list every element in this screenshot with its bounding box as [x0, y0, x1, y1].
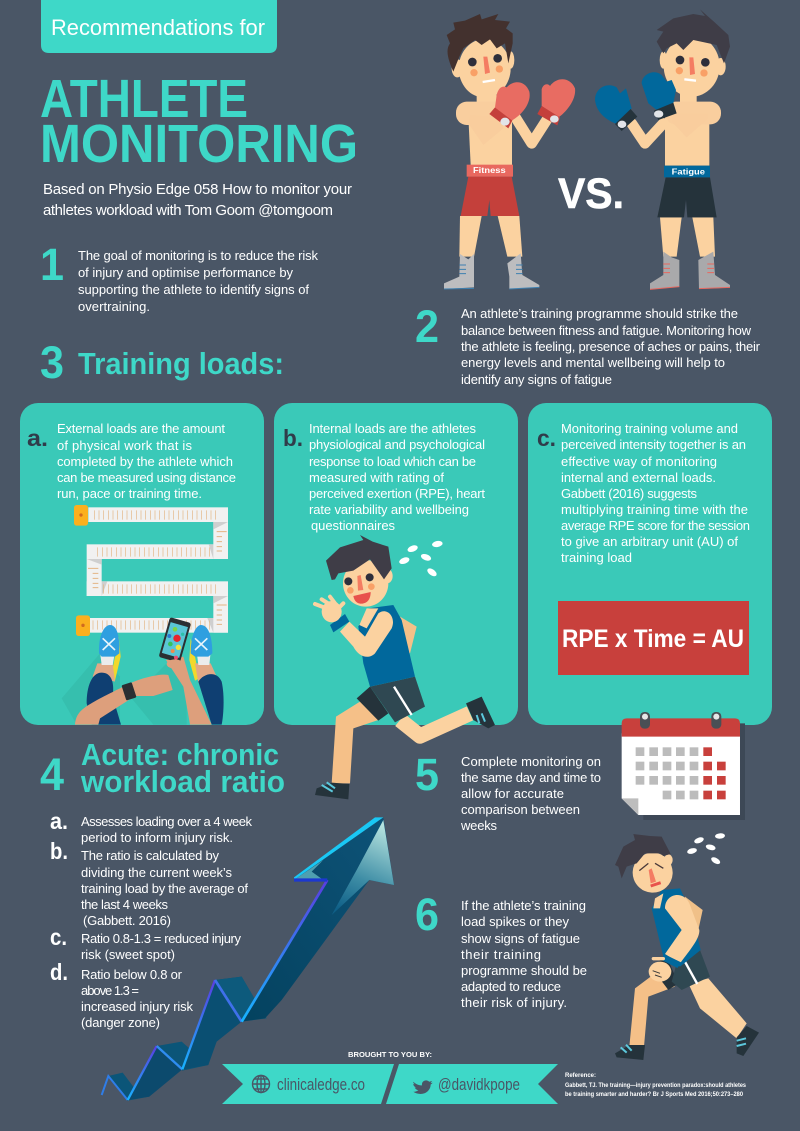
formula box — [558, 601, 749, 675]
reference: Reference: — [565, 1073, 596, 1079]
point 1: The goal of monitoring is to reduce the risk — [78, 248, 318, 263]
combined monitoring text: perceived intensity together is an — [561, 437, 746, 452]
point 4 list — [50, 808, 252, 1030]
combined monitoring text: internal and external loads. — [561, 470, 716, 485]
point 4 list: (danger zone) — [81, 1015, 160, 1030]
point 4 list: (Gabbett. 2016) — [83, 913, 171, 928]
point 1 — [40, 239, 318, 314]
point 4 list: dividing the current week’s — [81, 865, 232, 880]
illustration: fatigued runner — [615, 833, 759, 1060]
panel: combined monitoring — [528, 403, 772, 725]
external loads text: External loads are the amount — [57, 421, 225, 436]
combined monitoring text: training load — [561, 550, 632, 565]
combined monitoring text — [561, 421, 750, 565]
vs label: VS. — [558, 170, 624, 218]
combined monitoring text: Monitoring training volume and — [561, 421, 738, 436]
internal loads text: Internal loads are the athletes — [309, 421, 476, 436]
point 2: 2 — [415, 301, 439, 352]
internal loads text — [309, 421, 485, 533]
point 4 list: the last 4 weeks — [81, 897, 168, 912]
reference — [565, 1073, 747, 1098]
point 2: An athlete’s training programme should strike the — [461, 306, 738, 321]
internal loads text: questionnaires — [311, 518, 396, 533]
combined monitoring text: multiplying training time with the — [561, 502, 748, 517]
panel: combined monitoring: c. — [537, 425, 556, 451]
point 1: 1 — [40, 239, 64, 290]
point 1: supporting the athlete to identify signs of — [78, 282, 309, 297]
point 4 list: Ratio 0.8-1.3 = reduced injury — [81, 931, 242, 946]
point 4 list: risk (sweet spot) — [81, 947, 175, 962]
point 4 list: The ratio is calculated by — [81, 848, 220, 863]
point 6: their training — [461, 947, 541, 962]
panel: external loads: a. — [27, 425, 48, 451]
point 4 list: c. — [50, 924, 67, 950]
point 4 list: above 1.3 = — [81, 983, 139, 998]
subtitle: Based on Physio Edge 058 How to monitor your — [43, 181, 352, 198]
point 5: comparison between — [461, 802, 580, 817]
external loads text: of physical work that is — [57, 438, 192, 453]
internal loads text: response to load which can be — [309, 454, 476, 469]
internal loads text: perceived exertion (RPE), heart — [309, 486, 485, 501]
point 4 list: d. — [50, 959, 68, 985]
reference: Gabbett, TJ. The training—injury prevention paradox:should athletes — [565, 1083, 747, 1089]
point 5 — [415, 749, 601, 833]
panel: internal loads — [274, 403, 518, 725]
ribbon: twitter — [386, 1064, 558, 1104]
point 2: the athlete is feeling, presence of aches or pains, their — [461, 339, 761, 354]
point 6: programme should be — [461, 963, 587, 978]
title: MONITORING — [40, 114, 358, 174]
boxers illustration — [444, 9, 730, 290]
icon: globe — [252, 1076, 270, 1092]
external loads text: can be measured using distance — [57, 470, 236, 485]
point 6 — [415, 889, 587, 1010]
boxer: fitness: Fitness — [473, 165, 506, 175]
point 5: allow for accurate — [461, 786, 564, 801]
boxer: fitness — [444, 14, 575, 289]
point 4 heading: 4 — [40, 749, 64, 800]
point 4 list: period to inform injury risk. — [81, 830, 233, 845]
point 4 list: b. — [50, 838, 68, 864]
combined monitoring text: effective way of monitoring — [561, 454, 717, 469]
point 4 heading — [40, 737, 285, 800]
point 4 heading: workload ratio — [80, 764, 285, 799]
combined monitoring text: to give an arbitrary unit (AU) of — [561, 534, 738, 549]
panel: internal loads: b. — [283, 425, 303, 451]
point 3 heading: 3 — [40, 337, 64, 388]
point 5: 5 — [415, 749, 439, 800]
subtitle: athletes workload with Tom Goom @tomgoom — [43, 202, 333, 219]
illustration: rising arrow — [102, 817, 394, 1101]
point 3 heading — [40, 337, 284, 388]
formula box: RPE x Time = AU — [562, 625, 744, 653]
point 4 list: increased injury risk — [81, 999, 194, 1014]
external loads text: run, pace or training time. — [57, 486, 202, 501]
panel: external loads — [20, 403, 264, 725]
point 4 list: Ratio below 0.8 or — [81, 967, 183, 982]
illustration: tape measure, feet, phone and watch — [62, 505, 228, 725]
point 5: the same day and time to — [461, 770, 601, 785]
point 6: show signs of fatigue — [461, 931, 580, 946]
point 2 — [415, 301, 761, 387]
point 2: energy levels and mental wellbeing will help to — [461, 355, 725, 370]
brought to you by label: BROUGHT TO YOU BY: — [348, 1050, 432, 1059]
header banner — [41, 0, 277, 53]
point 6: adapted to reduce — [461, 979, 561, 994]
combined monitoring text: Gabbett (2016) suggests — [561, 486, 698, 501]
subtitle — [43, 181, 352, 219]
icon: twitter bird — [413, 1080, 433, 1094]
point 4 heading: Acute: chronic — [81, 737, 279, 772]
header banner: Recommendations for — [51, 15, 265, 40]
internal loads text: measured with rating of — [309, 470, 444, 485]
point 4 list: training load by the average of — [81, 881, 248, 896]
combined monitoring text: average RPE score for the session — [561, 518, 750, 533]
title: ATHLETE — [40, 69, 248, 129]
point 2: balance between fitness and fatigue. Monitoring how — [461, 323, 752, 338]
point 1: of injury and optimise performance by — [78, 265, 294, 280]
point 3 heading: Training loads: — [78, 346, 284, 381]
internal loads text: physiological and psychological — [309, 437, 485, 452]
icon: calendar — [622, 712, 745, 820]
internal loads text: rate variability and wellbeing — [309, 502, 469, 517]
boxer: fatigue: Fatigue — [672, 167, 705, 177]
point 5: weeks — [460, 818, 498, 833]
point 6: If the athlete’s training — [461, 898, 586, 913]
point 2: identify any signs of fatigue — [461, 372, 612, 387]
illustration: runner — [315, 535, 495, 799]
boxer: fatigue — [595, 9, 730, 290]
ribbon: twitter: @davidkpope — [438, 1075, 520, 1094]
title — [40, 69, 358, 174]
external loads text: completed by the athlete which — [57, 454, 233, 469]
point 5: Complete monitoring on — [461, 754, 601, 769]
external loads text — [57, 421, 236, 501]
point 4 list: Assesses loading over a 4 week — [81, 814, 252, 829]
ribbon: website: clinicaledge.co — [277, 1075, 365, 1094]
reference: be training smarter and harder? Br J Sports Med 2016;50:273–280 — [565, 1092, 744, 1098]
ribbon: website — [222, 1064, 394, 1104]
point 6: 6 — [415, 889, 439, 940]
point 1: overtraining. — [78, 299, 150, 314]
point 6: their risk of injury. — [461, 995, 567, 1010]
point 6: load spikes or they — [461, 914, 570, 929]
point 4 list: a. — [50, 808, 68, 834]
